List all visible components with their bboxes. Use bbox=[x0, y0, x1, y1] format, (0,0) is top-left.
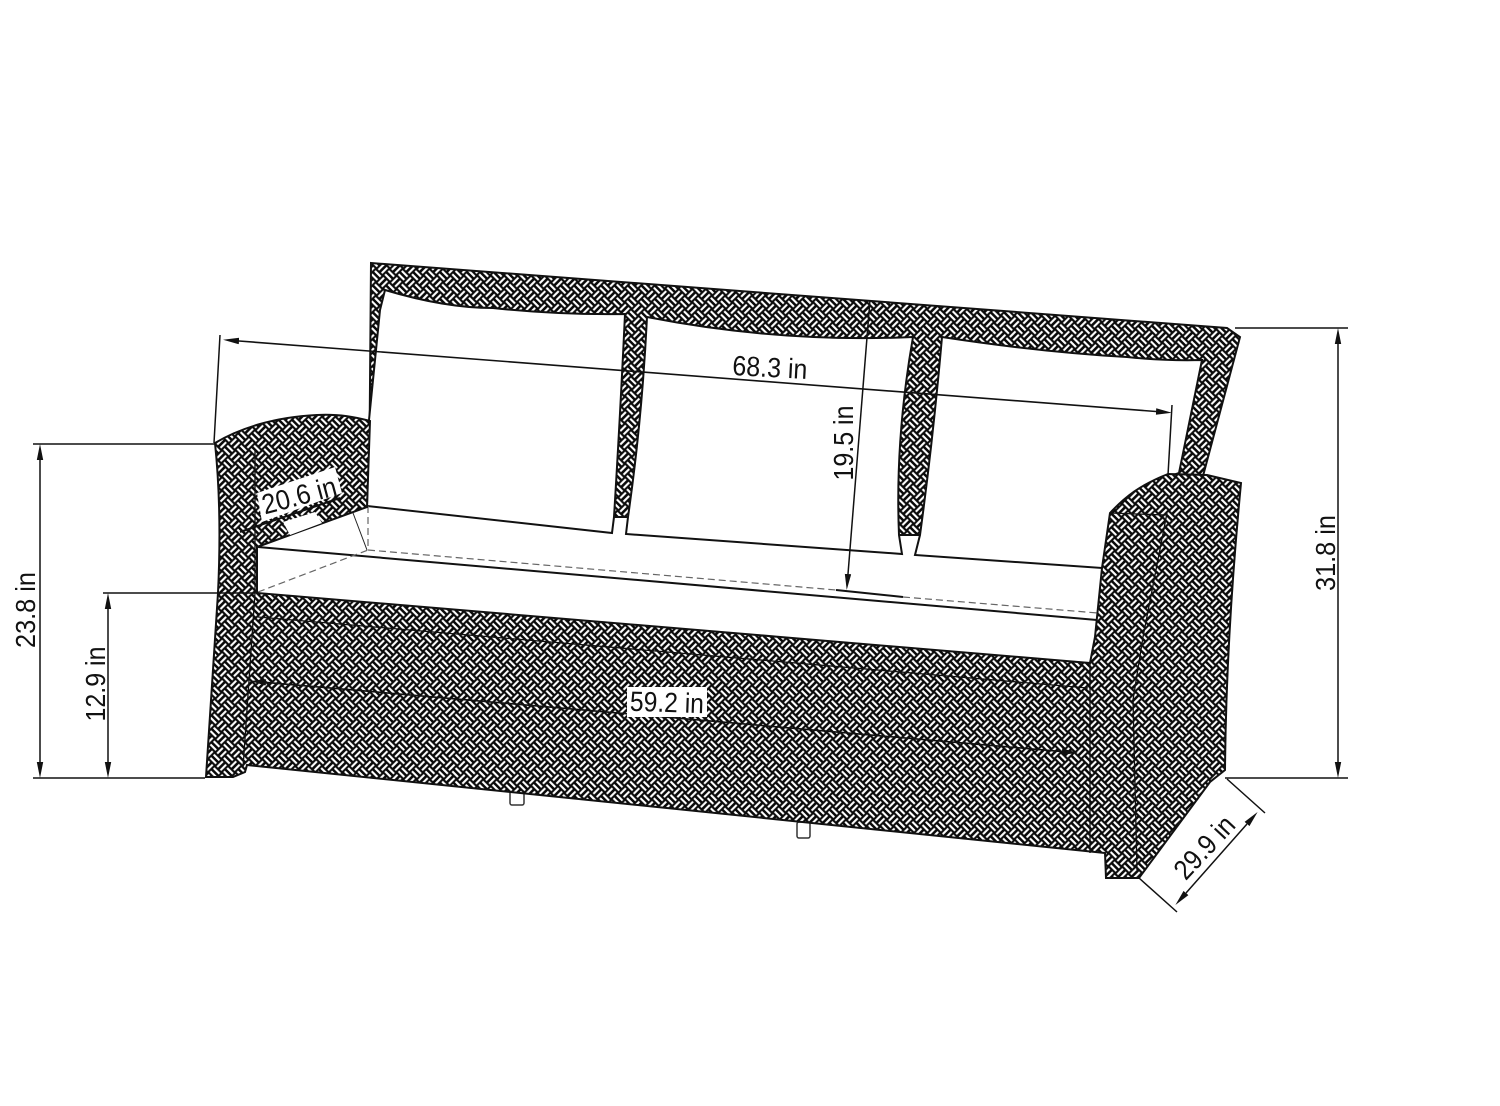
dimension: arm height 23.8 in: 23.8 in bbox=[10, 572, 41, 648]
sofa body: arms and front base bbox=[206, 415, 1241, 878]
dimension: seat depth 20.6 in bbox=[240, 467, 342, 535]
back cushion: left bbox=[367, 290, 625, 533]
back frame bbox=[369, 263, 1240, 540]
dimension: seat depth 20.6 in: 20.6 in bbox=[258, 471, 340, 520]
dimension: overall depth 29.9 in: 29.9 in bbox=[1167, 809, 1241, 885]
dimension: arm height 23.8 in bbox=[10, 444, 215, 778]
dimension: overall width 68.3 in: 68.3 in bbox=[732, 350, 808, 385]
dimension: overall depth 29.9 in bbox=[1139, 779, 1265, 912]
seat cushion bbox=[258, 506, 1098, 620]
back cushion: right bbox=[915, 337, 1202, 568]
back cushion: centre bbox=[626, 317, 913, 554]
dimension: back height 19.5 in: 19.5 in bbox=[828, 406, 859, 480]
dimension: overall height 31.8 in bbox=[1225, 328, 1348, 778]
dimension: seat height 12.9 in: 12.9 in bbox=[80, 646, 111, 722]
dimension: back height 19.5 in bbox=[828, 300, 870, 574]
sofa legs bbox=[510, 790, 810, 838]
dimension: overall width 68.3 in bbox=[214, 335, 1172, 475]
sofa drawing bbox=[206, 263, 1241, 878]
dimension: seat width 59.2 in: 59.2 in bbox=[629, 686, 705, 719]
seam lines on arms and base bbox=[243, 450, 1167, 870]
dimension: overall height 31.8 in: 31.8 in bbox=[1310, 515, 1341, 591]
dimension: seat width 59.2 in bbox=[266, 682, 1062, 752]
